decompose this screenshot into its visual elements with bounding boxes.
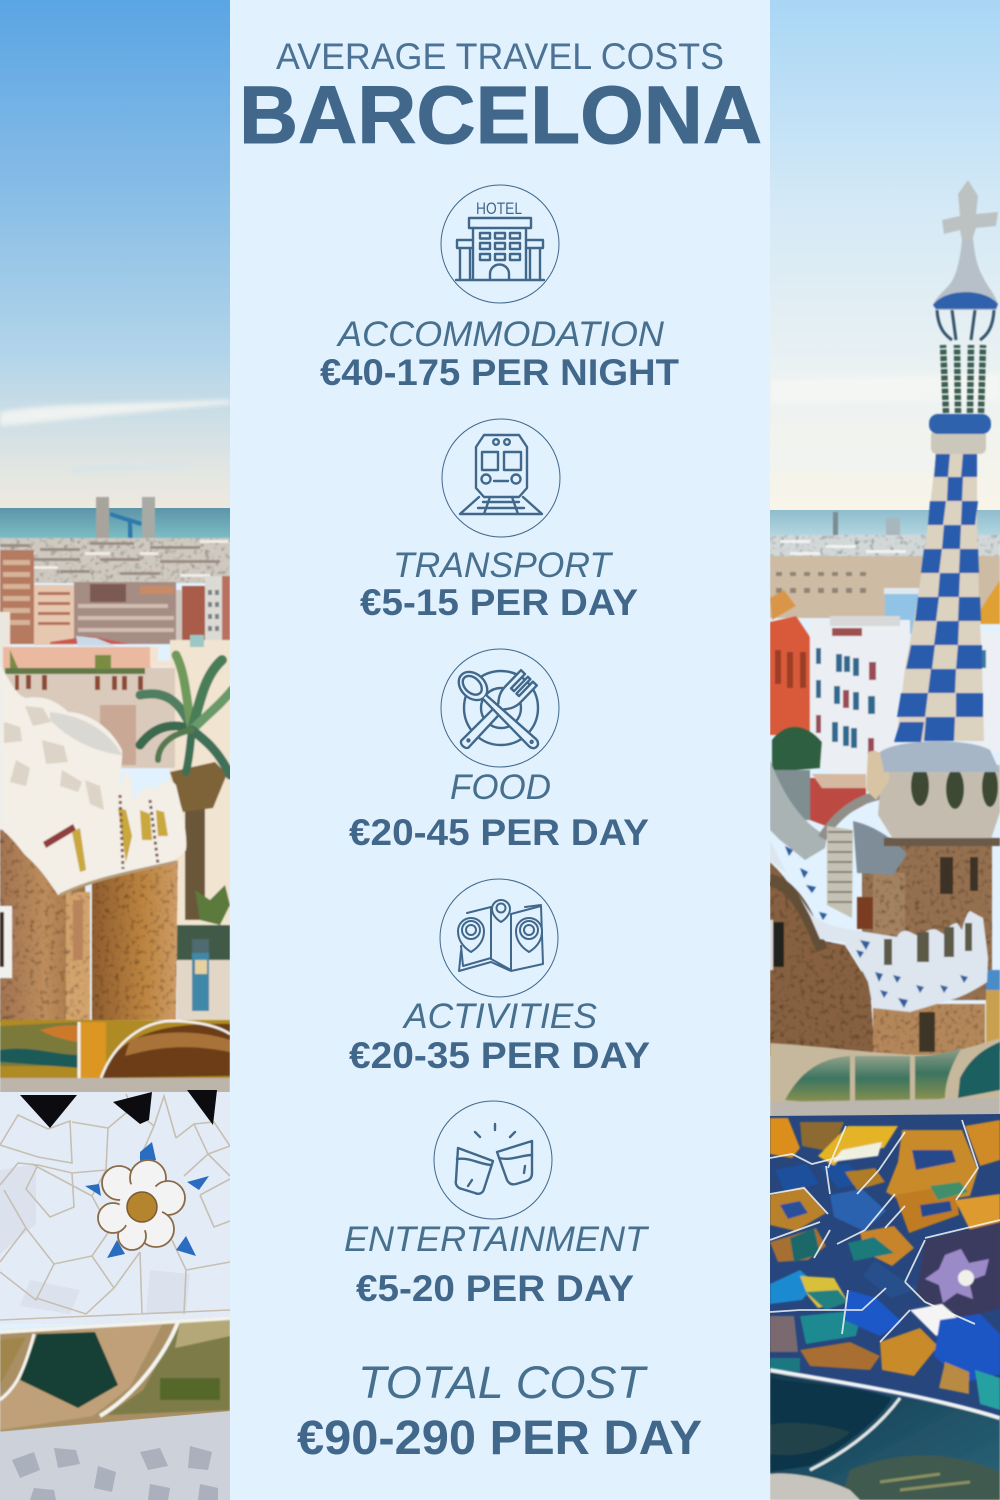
price: food: €20-45 PER DAY — [349, 812, 649, 853]
photo: Park Güell spire and mosaic bench, right — [770, 0, 1000, 1500]
label: entertainment: ENTERTAINMENT — [344, 1220, 650, 1259]
icon: clinking glasses — [434, 1101, 552, 1219]
label: accommodation: ACCOMMODATION — [336, 315, 665, 354]
label: total cost: TOTAL COST — [358, 1357, 649, 1408]
icon: hotel: HOTEL — [476, 199, 522, 218]
price: accommodation: €40-175 PER NIGHT — [320, 352, 679, 393]
stairs — [827, 826, 853, 918]
icon: train — [442, 419, 560, 537]
title — [239, 36, 762, 161]
heading: Barcelona: BARCELONA — [239, 70, 762, 161]
subtitle: average travel costs: AVERAGE TRAVEL COSTS — [276, 36, 724, 77]
price: activities: €20-35 PER DAY — [349, 1035, 650, 1076]
stone tower body — [770, 838, 992, 1056]
roof mosaic beside stairs — [770, 760, 827, 860]
price: transport: €5-15 PER DAY — [360, 582, 638, 623]
wave mosaic parapet — [770, 840, 988, 1012]
colourful mosaic — [770, 1114, 1000, 1420]
ground mosaic — [0, 1411, 230, 1500]
panel: centre light blue column — [230, 0, 770, 1500]
photo: Park Güell and city view, left — [0, 0, 232, 1500]
spire — [866, 180, 1000, 846]
lower bench — [0, 1316, 230, 1432]
icon: map with pins — [440, 879, 558, 997]
bench top — [0, 1020, 230, 1094]
bench top right — [770, 1038, 1000, 1118]
label: activities: ACTIVITIES — [402, 997, 597, 1036]
icon: hotel — [441, 185, 559, 303]
price: entertainment: €5-20 PER DAY — [356, 1268, 634, 1309]
label: transport: TRANSPORT — [393, 546, 614, 585]
lower bench right — [770, 1370, 1000, 1500]
label: food: FOOD — [450, 768, 551, 807]
white mosaic with flower — [0, 1090, 230, 1324]
price: total: €90-290 PER DAY — [297, 1412, 702, 1465]
icon: food, plate with spoon and fork — [441, 649, 559, 767]
